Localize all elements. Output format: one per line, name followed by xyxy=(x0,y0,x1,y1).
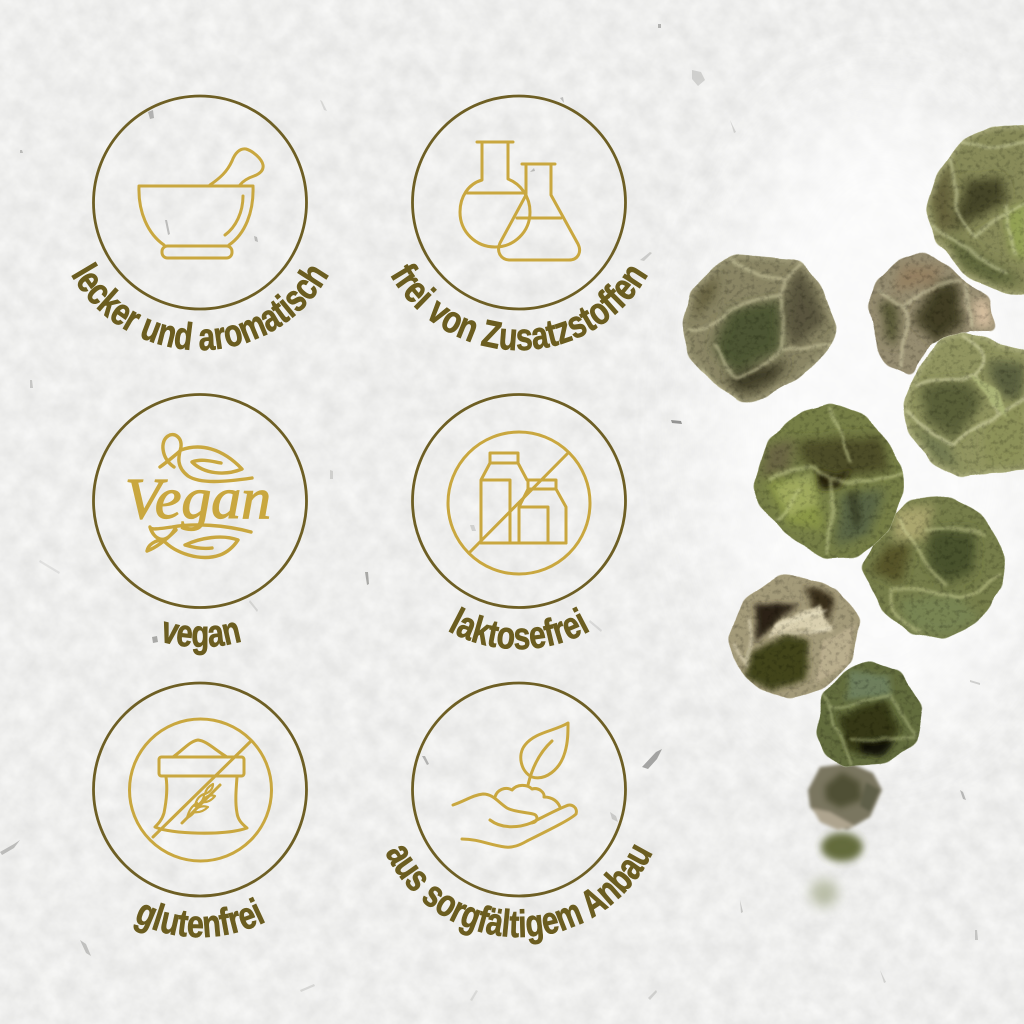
peppercorn 4: right middle xyxy=(902,330,1024,478)
badge ring xyxy=(94,683,306,896)
label: laktosefrei xyxy=(448,606,590,650)
peppercorns xyxy=(682,123,1024,907)
badge ring xyxy=(94,96,306,309)
peppercorn: slightly blurred small xyxy=(808,763,882,830)
badge: aus sorgfältigem Anbau xyxy=(386,682,652,944)
badge: frei von Zusatzstoffen xyxy=(390,94,648,351)
badge: lecker und aromatisch xyxy=(71,94,329,351)
label: lecker und aromatisch xyxy=(71,262,329,351)
badge: glutenfrei xyxy=(92,682,308,938)
lettering: Vegan xyxy=(125,466,271,531)
lower leaf flourish xyxy=(147,525,251,557)
peppercorn: blurred mid xyxy=(821,832,863,862)
label: frei von Zusatzstoffen xyxy=(390,264,648,351)
white glow behind peppercorns xyxy=(710,100,1024,740)
badge: laktosefrei xyxy=(411,393,627,650)
badge ring xyxy=(412,394,626,608)
label: glutenfrei xyxy=(134,896,265,938)
icon: laboratory flasks xyxy=(460,142,580,260)
badge ring xyxy=(94,394,306,608)
badge ring xyxy=(412,96,626,309)
icon: hand holding seedling xyxy=(453,723,576,847)
peppercorn: blurred far xyxy=(810,879,838,907)
upper leaf flourish xyxy=(160,435,252,482)
peppercorn 7: tan left lower xyxy=(728,575,860,700)
badge: vegan xyxy=(92,393,308,656)
label: aus sorgfältigem Anbau xyxy=(386,844,652,944)
peppercorn 6: right lower xyxy=(860,497,1007,640)
peppercorn 3: grey-brown behind xyxy=(867,250,995,377)
icon: crossed out milk cartons xyxy=(448,432,590,574)
icon: crossed out flour sack xyxy=(130,719,272,861)
peppercorn 5: centre green xyxy=(753,403,903,558)
icon: mortar and pestle xyxy=(139,149,263,258)
peppercorn 1: left brown-green xyxy=(682,254,837,403)
badge ring xyxy=(412,683,626,896)
label: vegan xyxy=(164,621,241,656)
icon: vegan lettering with leaves xyxy=(125,435,271,557)
peppercorn 8: small dark green xyxy=(815,660,923,767)
peppercorn 2: top right xyxy=(925,123,1024,296)
